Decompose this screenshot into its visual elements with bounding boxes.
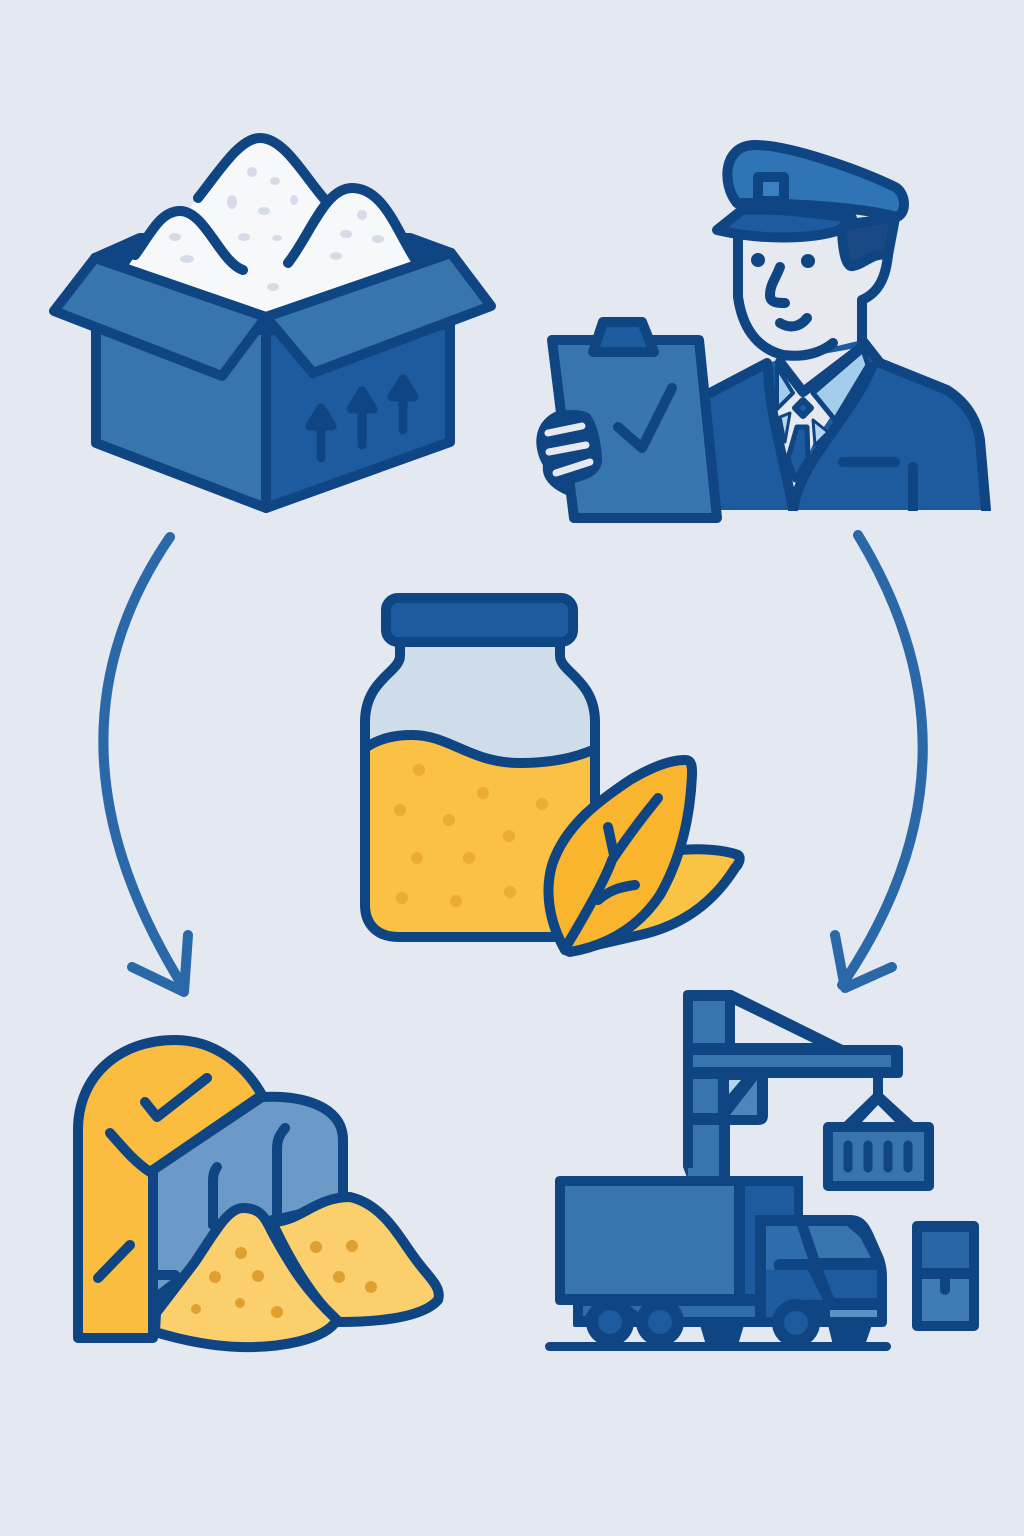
silo <box>78 1040 262 1338</box>
crane <box>683 990 903 1180</box>
hand <box>537 411 601 496</box>
officer cap <box>727 145 904 217</box>
back leaf <box>575 849 740 950</box>
officer jacket <box>705 340 986 510</box>
icon: open box with white powder <box>54 138 491 508</box>
arrow: officer to port <box>835 535 923 988</box>
front leaf <box>548 760 692 952</box>
officer face <box>738 225 888 356</box>
right pile <box>272 1197 439 1322</box>
arrow: box to silo <box>103 537 188 992</box>
icon: jar of yellow powder with leaves <box>365 598 740 952</box>
icon: customs officer with clipboard <box>537 145 1002 525</box>
hanging container <box>823 1075 934 1191</box>
officer shirt, collar and tie <box>768 347 913 510</box>
icon: silo and powder piles <box>78 1040 439 1347</box>
left pile <box>155 1208 337 1347</box>
icon: crane, container and truck <box>545 990 979 1351</box>
truck <box>545 1176 891 1351</box>
mask below jacket <box>722 511 1002 525</box>
blue rock <box>153 1097 343 1300</box>
clipboard <box>552 340 717 518</box>
stacked small container <box>912 1221 979 1331</box>
